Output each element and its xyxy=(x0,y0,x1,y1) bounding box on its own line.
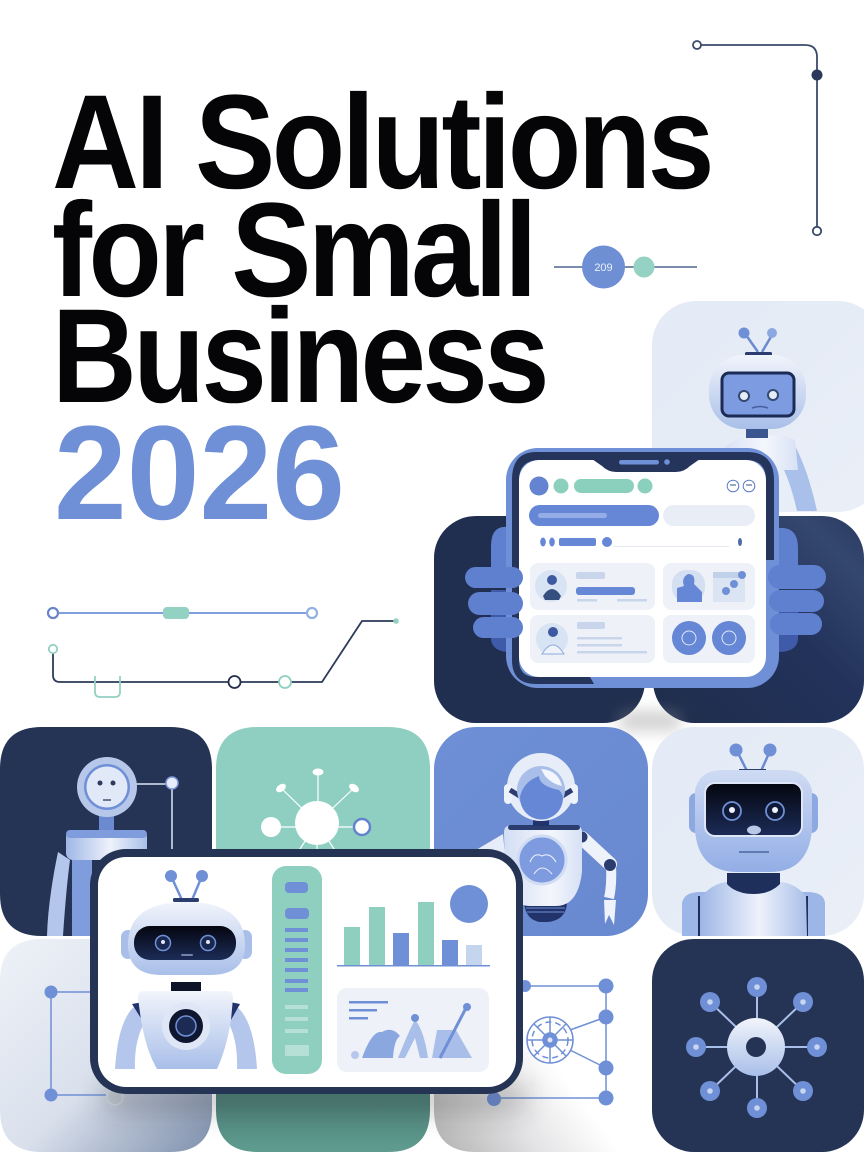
robot: visor bot xyxy=(682,744,825,936)
panel: pale grey tile with network wheel xyxy=(434,939,648,1152)
panel: navy tile with slim robot xyxy=(0,727,212,936)
drop shadow between tiles xyxy=(620,712,680,730)
panel: blue tile with robot xyxy=(434,727,648,936)
bar chart xyxy=(337,902,490,966)
timeline with badge xyxy=(554,246,697,288)
circuit line: top right corner xyxy=(693,41,822,235)
tablet device xyxy=(506,448,779,688)
robot: slim figure with round head xyxy=(47,757,178,936)
title xyxy=(52,68,711,431)
icon: left fingers over tablet xyxy=(465,567,523,638)
panel: pale tile with node frame xyxy=(0,939,212,1152)
panel: navy tile with hub network xyxy=(652,939,864,1152)
mint sidebar xyxy=(272,866,322,1074)
main dashboard screen xyxy=(90,849,523,1094)
area chart card xyxy=(337,988,489,1072)
icon: bracket nodes xyxy=(44,986,123,1105)
panel: pale tile with robot, top right xyxy=(652,301,864,512)
icon: wheel network xyxy=(487,978,614,1106)
chart status circle xyxy=(450,885,488,923)
robot: dashboard mascot xyxy=(115,870,257,1069)
year 2026: 2026 xyxy=(54,399,345,548)
panel: mint tile with network icon xyxy=(216,727,430,860)
icon: hub network xyxy=(261,768,370,855)
circuit line: navy routed path xyxy=(49,618,399,697)
icon: left palm behind tablet xyxy=(491,527,510,652)
tablet dial card xyxy=(663,615,755,663)
tablet breadcrumb row xyxy=(540,537,742,547)
panel: navy tile, tablet right xyxy=(653,516,864,723)
tablet profile card two xyxy=(530,615,655,663)
tablet profile card one xyxy=(530,563,655,610)
icon: hub and nodes xyxy=(686,977,827,1118)
main screen shadow xyxy=(105,1085,525,1111)
title: for Small xyxy=(52,176,534,325)
tablet top bar xyxy=(530,476,755,496)
tablet image card xyxy=(663,563,755,610)
panel: pale tile with visor robot xyxy=(652,727,864,936)
tablet search pills xyxy=(529,505,755,526)
timeline with badge: 209 xyxy=(594,262,613,274)
robot: antenna head behind tablet xyxy=(709,328,817,511)
panel: teal tile lower xyxy=(216,939,430,1152)
circuit line: blue with mint pill xyxy=(48,607,317,619)
icon: right palm behind tablet xyxy=(778,528,798,652)
title: Business xyxy=(52,282,546,431)
panel: navy tile, tablet left xyxy=(434,516,645,723)
icon: right fingers over tablet xyxy=(768,565,826,635)
title: AI Solutions xyxy=(52,68,711,217)
robot: helmeted android xyxy=(476,753,616,925)
